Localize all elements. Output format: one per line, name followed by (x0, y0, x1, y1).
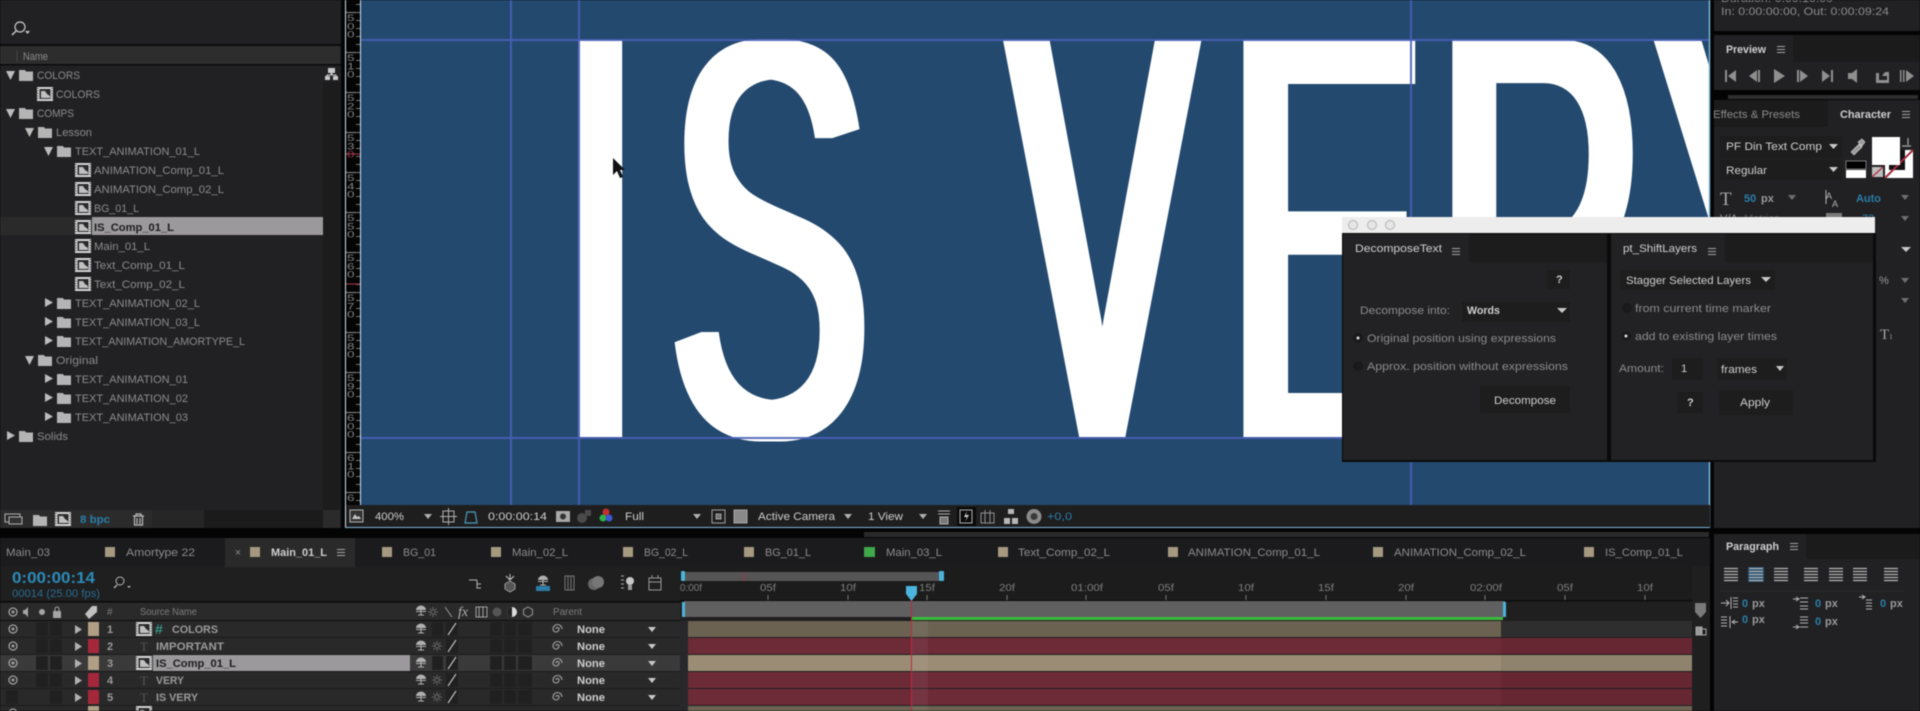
ruler numbers: 8 (347, 342, 355, 352)
stroke options arrow (1901, 247, 1911, 252)
kerning: Metrics (1744, 213, 1780, 225)
ruler tick labels (680, 583, 1653, 594)
icon: draft 3d (505, 574, 515, 592)
panel: preview (1714, 35, 1920, 90)
tab: BG_01: BG_01 (403, 547, 436, 559)
timecode: 00014 (25.00 fps) (12, 588, 100, 600)
stagger dropdown (1620, 270, 1775, 290)
indent: left (1721, 597, 1766, 610)
layer 2: IMPORTANT: IMPORTANT (156, 641, 224, 653)
apply button: Apply (1740, 397, 1771, 409)
radio: original position: Original position using expressions (1367, 333, 1557, 345)
icon: camera (556, 511, 570, 522)
ruler tick labels: 0:00f (680, 583, 702, 594)
floating window: scripts (1342, 217, 1876, 462)
ruler tick labels: 15f (1318, 583, 1334, 594)
exposure value: +0,0 (1047, 511, 1072, 523)
viewer timecode: 0:00:00:14 (488, 511, 547, 523)
ruler numbers: 5 (347, 94, 355, 103)
row: TEXT_ANIMATION_AMORTYPE_L: TEXT_ANIMATION_AMORTYPE_L (75, 336, 245, 348)
row: BG_01_L: BG_01_L (94, 203, 139, 215)
icon: interpret footage (5, 514, 22, 524)
panel: timeline (0, 538, 1710, 711)
indent: left: px (1752, 598, 1766, 610)
decompose into dropdown: Words (1467, 305, 1500, 317)
indent: left: 0 (1742, 598, 1748, 610)
row: Main_01_L: Main_01_L (94, 241, 150, 253)
row: IS_Comp_01_L selected: IS_Comp_01_L (94, 222, 174, 234)
leading: Auto (1856, 193, 1881, 205)
ruler tick labels: 05f (1158, 583, 1174, 594)
scale percent (1879, 275, 1909, 287)
ruler numbers: 0 (347, 471, 355, 480)
alignment icons (1724, 567, 1898, 582)
font size: T (1720, 189, 1732, 210)
row: Solids folder (7, 431, 69, 443)
header: number: # (107, 607, 113, 618)
row: COLORS folder: COLORS (37, 70, 80, 82)
help button: ? (1556, 274, 1563, 286)
tab: Amortype 22 (105, 547, 195, 559)
ruler numbers: 0 (347, 22, 355, 32)
baseline arrow (1901, 298, 1909, 303)
panel: character (1713, 100, 1920, 528)
preview controls (1725, 69, 1914, 83)
tab: Main_01_L active: × (235, 547, 241, 559)
tab: Main_02_L: Main_02_L (512, 547, 568, 559)
column header: Name: Name (23, 51, 48, 63)
panel: info: In: 0:00:00:00, Out: 0:00:09:24 (1721, 6, 1889, 18)
amount field: Amount: (1619, 363, 1664, 375)
row: Original folder: Original (56, 355, 98, 367)
header icon: audio (23, 607, 28, 617)
header icon: eye (9, 608, 17, 616)
row: Lesson folder: Lesson (56, 127, 92, 139)
layer 5: IS VERY: 5 (107, 692, 113, 704)
column header: Name (0, 46, 341, 66)
icon: rgb channels (600, 508, 612, 522)
column headers (0, 601, 680, 622)
decompose into dropdown: Decompose into: (1360, 305, 1450, 317)
indent: before paragraph: 0 (1815, 598, 1821, 610)
ruler numbers: 0 (347, 431, 355, 440)
ruler numbers: 0 (347, 391, 355, 400)
row: TEXT_ANIMATION_02: TEXT_ANIMATION_02 (75, 393, 188, 405)
tab: BG_01_L: BG_01_L (765, 547, 811, 559)
panel: project (0, 0, 341, 528)
indent: after paragraph: 0 (1815, 616, 1821, 628)
tab: Text_Comp_02_L: Text_Comp_02_L (1018, 547, 1110, 559)
indent: first line: 0 (1880, 598, 1886, 610)
panel: preview: Preview (1726, 44, 1766, 56)
project footer bar (0, 510, 340, 528)
tab: ANIMATION_Comp_02_L: ANIMATION_Comp_02_L (1394, 547, 1526, 559)
radio: from current time marker: from current time marker (1635, 303, 1771, 315)
icon: new folder (33, 515, 47, 526)
bar: COLORS (688, 621, 1501, 637)
row: Text_Comp_01_L: Text_Comp_01_L (94, 260, 185, 272)
scale percent: % (1879, 275, 1889, 287)
ruler numbers: 0 (347, 422, 355, 432)
tab bar (0, 538, 1710, 567)
bar: IS_Comp_01_L (688, 655, 1692, 671)
row: COLORS comp (37, 87, 100, 101)
ruler numbers: 5 (347, 294, 355, 303)
ruler numbers: 0 (347, 151, 355, 160)
frames dropdown: frames (1721, 364, 1758, 376)
tab: IS_Comp_01_L: IS_Comp_01_L (1605, 547, 1683, 559)
row: TEXT_ANIMATION_02_L: TEXT_ANIMATION_02_L (75, 298, 200, 310)
layer list (0, 621, 680, 711)
ruler numbers: 6 (347, 414, 355, 423)
panel: paragraph: Paragraph (1726, 541, 1779, 553)
ruler numbers: 1 (347, 462, 355, 472)
ruler numbers: 5 (347, 374, 355, 383)
ruler numbers: 1 (347, 62, 355, 72)
help button (1677, 392, 1703, 413)
layer 4: VERY (9, 673, 656, 688)
icon: new comp (55, 512, 71, 526)
layer 1: COLORS: 1 (107, 624, 113, 636)
ruler numbers (347, 14, 355, 503)
layer 1: COLORS: COLORS (172, 624, 218, 636)
icon: timeline (981, 510, 994, 523)
ruler numbers: 0 (347, 111, 355, 120)
row: ANIMATION_Comp_01_L: ANIMATION_Comp_01_L (94, 165, 224, 177)
layer 5: IS VERY (6, 690, 656, 705)
leading: A (1826, 191, 1832, 201)
ruler numbers: 7 (347, 302, 355, 312)
layer bars (680, 621, 1692, 711)
help button: ? (1687, 397, 1694, 409)
header icon: solo (39, 609, 45, 615)
leading: A (1832, 199, 1838, 209)
swatch: black and white (1846, 161, 1866, 178)
row: Text_Comp_02_L: Text_Comp_02_L (94, 279, 185, 291)
work area bar (680, 600, 1710, 620)
layer 2: IMPORTANT (9, 639, 656, 654)
row: ANIMATION_Comp_02_L: ANIMATION_Comp_02_L (94, 184, 224, 196)
ruler numbers: 6 (347, 262, 355, 272)
ruler tick labels: 05f (1557, 583, 1573, 594)
tab: Amortype 22: Amortype 22 (126, 547, 195, 559)
stagger dropdown: Stagger Selected Layers (1626, 275, 1752, 287)
header icon: lock (53, 607, 61, 618)
icon: shy layers (536, 576, 550, 591)
layer 3: IS_Comp_01_L selected (9, 655, 656, 671)
ruler numbers: 5 (347, 334, 355, 343)
layer 5: IS VERY: IS VERY (156, 692, 199, 704)
row: Original folder (25, 355, 98, 367)
row: TEXT_ANIMATION_01_L folder: TEXT_ANIMATION_01_L (75, 146, 200, 158)
ruler tick labels: 15f (919, 583, 935, 594)
icon: flowchart toggle (1004, 509, 1018, 524)
layer 5: IS VERY: None (577, 692, 605, 704)
ruler tick labels: 10f (840, 583, 856, 594)
decompose button: Decompose (1494, 395, 1556, 407)
indent: after paragraph: px (1825, 616, 1839, 628)
icon: frame blending (565, 576, 574, 590)
layer 1: COLORS (9, 621, 656, 637)
bar: VERY (688, 672, 1692, 688)
ruler numbers: 0 (347, 271, 355, 280)
camera selector: Active Camera (758, 511, 836, 523)
label: 8 bpc: 8 bpc (80, 514, 110, 526)
layer 4: VERY: 4 (107, 675, 114, 687)
kerning (1720, 213, 1909, 225)
ruler numbers: 9 (347, 382, 355, 392)
radio: add to existing layer times: add to existing layer times (1635, 331, 1778, 343)
ruler tick labels: 02:00f (1470, 583, 1502, 594)
apply button (1719, 390, 1793, 415)
icon: calendar (649, 575, 661, 590)
icon: trash (133, 514, 144, 525)
ruler (345, 0, 361, 528)
layer 1: COLORS: None (577, 624, 605, 636)
font family: PF Din Text Comp (1726, 141, 1822, 153)
header: Source Name: Source Name (140, 607, 197, 618)
tab: BG_01 (382, 547, 436, 559)
resolution: Full (625, 511, 644, 523)
icon: mouse cursor (613, 158, 625, 178)
layer 1: COLORS: # (155, 621, 163, 637)
tab: Main_01_L active: Main_01_L (271, 547, 327, 559)
decompose into dropdown (1360, 302, 1570, 322)
indent: right: 0 (1742, 614, 1748, 626)
layer 3: IS_Comp_01_L selected: None (577, 658, 605, 670)
icon: timeline search (114, 577, 131, 588)
tab: BG_02_L (623, 547, 688, 559)
time ruler (680, 566, 1692, 601)
scroll strip: side panels (1728, 95, 1918, 99)
leading (1826, 190, 1909, 209)
panel: paragraph (1714, 534, 1920, 711)
composition viewer (360, 0, 1710, 506)
icon: motion blur (588, 576, 604, 590)
layer 4: VERY: T (140, 673, 148, 688)
panel: info (1714, 0, 1920, 31)
ruler tick labels: 05f (760, 583, 776, 594)
indent: right (1721, 614, 1766, 628)
font style (1720, 160, 1842, 180)
tab: Character: Character (1840, 109, 1892, 121)
layer 2: IMPORTANT: None (577, 641, 605, 653)
icon: fast preview (957, 507, 976, 526)
icon: snapshot comp (350, 510, 363, 522)
icon: eyedropper (1851, 139, 1865, 155)
ruler numbers: 5 (347, 254, 355, 263)
timecode (12, 570, 100, 600)
layer 2: IMPORTANT: 2 (107, 641, 113, 653)
layer 2: IMPORTANT: T (140, 639, 148, 654)
ruler numbers: 0 (347, 71, 355, 80)
guides (361, 0, 1709, 505)
timeline switches (469, 574, 661, 592)
help button (1547, 270, 1570, 289)
ruler numbers: 5 (347, 174, 355, 183)
tab: Main_03_L: Main_03_L (886, 547, 942, 559)
layer 3: IS_Comp_01_L selected: IS_Comp_01_L (156, 658, 236, 670)
bar: IMPORTANT (688, 638, 1692, 654)
indent: first line: px (1890, 598, 1904, 610)
row: COLORS folder (6, 70, 80, 82)
ruler numbers: 5 (347, 214, 355, 223)
row: Text_Comp_02_L (75, 277, 185, 291)
ruler numbers: 0 (347, 231, 355, 240)
ruler tick labels: 10f (1238, 583, 1254, 594)
zoom level: 400% (375, 511, 404, 523)
tab: Effects & Presets: Effects & Presets (1713, 109, 1801, 121)
indent: first line (1859, 595, 1904, 610)
row: Lesson folder (25, 127, 92, 139)
row: TEXT_ANIMATION_03: TEXT_ANIMATION_03 (75, 412, 188, 424)
ruler numbers: 4 (347, 182, 355, 192)
bar: layer 6 (688, 706, 1692, 711)
big text: IS VERY (578, 39, 1710, 442)
row: Text_Comp_01_L (75, 258, 185, 272)
row: TEXT_ANIMATION_01: TEXT_ANIMATION_01 (75, 374, 188, 386)
indent: after paragraph (1793, 616, 1839, 629)
layer 4: VERY: None (577, 675, 605, 687)
scroll strip (864, 532, 1709, 537)
icon: pixel aspect (938, 511, 950, 524)
header: layer switches: fx (458, 605, 469, 620)
ruler numbers: 0 (347, 311, 355, 320)
ruler numbers: 5 (347, 222, 355, 232)
icon: mask (465, 512, 477, 523)
amount field (1619, 358, 1703, 380)
icon: exposure (1026, 509, 1042, 524)
swatch: no fill (1872, 167, 1883, 177)
layer 5: IS VERY: T (140, 690, 148, 705)
ruler numbers: 6 (347, 454, 355, 463)
ruler tick labels: 20f (1398, 583, 1414, 594)
font size: 50 (1744, 193, 1756, 205)
subscript T: T1 (1880, 327, 1893, 343)
row: Solids folder: Solids (37, 431, 69, 443)
icon: transparency grid (734, 510, 747, 523)
viewer toolbar (345, 505, 1710, 528)
font family (1720, 136, 1842, 158)
project tree (6, 70, 323, 443)
tab: Main_01_L active (235, 547, 345, 559)
playhead (906, 586, 917, 711)
ruler numbers: 5 (347, 54, 355, 63)
kerning: V/A (1720, 213, 1738, 225)
row: IS_Comp_01_L selected (75, 217, 323, 235)
ruler tick labels: 10f (1637, 583, 1653, 594)
ruler numbers: 0 (347, 351, 355, 360)
row: COMPS folder (6, 108, 74, 120)
timeline right column (1692, 566, 1710, 711)
ruler numbers: 5 (347, 14, 355, 23)
icon: flowchart (325, 68, 338, 80)
panel: DecomposeText (1343, 234, 1607, 460)
row: COMPS folder: COMPS (37, 108, 74, 120)
ruler numbers: 3 (347, 142, 355, 152)
tab: Main_03_L (864, 547, 942, 559)
tab: ANIMATION_Comp_01_L: ANIMATION_Comp_01_L (1188, 547, 1320, 559)
tab: BG_01_L (744, 547, 811, 559)
timecode: 0:00:00:14 (12, 570, 95, 587)
ruler numbers: 6 (347, 494, 355, 503)
ruler numbers: 5 (347, 134, 355, 143)
icon: toggle mask (712, 510, 725, 523)
font size (1720, 189, 1796, 210)
font size: px (1761, 193, 1775, 205)
row: Main_01_L (75, 239, 150, 253)
ruler numbers: 0 (347, 191, 355, 200)
row: TEXT_ANIMATION_03_L: TEXT_ANIMATION_03_L (75, 317, 200, 329)
window title bar (1342, 217, 1875, 233)
ruler numbers: 0 (347, 31, 355, 40)
row: COLORS comp: COLORS (56, 89, 100, 101)
ruler tick labels: 20f (999, 583, 1015, 594)
ruler tick labels: 01:00f (1071, 583, 1103, 594)
ruler numbers: 2 (347, 102, 355, 112)
icon: region grid (440, 508, 457, 525)
header: Parent: Parent (553, 607, 582, 618)
icon: show snapshot (577, 510, 591, 523)
decompose button (1480, 386, 1570, 413)
frames dropdown (1717, 358, 1787, 380)
tab: BG_02_L: BG_02_L (644, 547, 688, 559)
indent: right: px (1752, 614, 1766, 626)
swatch: fill and stroke (1872, 137, 1913, 178)
indent: before paragraph (1793, 597, 1839, 610)
tab title: DecomposeText (1355, 243, 1442, 255)
layer 4: VERY: VERY (156, 675, 185, 687)
amount field: 1 (1681, 363, 1687, 375)
indent: before paragraph: px (1825, 598, 1839, 610)
layer 3: IS_Comp_01_L selected: 3 (107, 658, 113, 670)
font style: Regular (1726, 165, 1767, 177)
icon: project search (12, 22, 30, 35)
layer 6 (cut off) (9, 706, 152, 711)
bar: IS VERY (688, 689, 1692, 705)
icon: graph bulb (621, 576, 634, 590)
tab title: pt_ShiftLayers (1623, 243, 1698, 255)
icon: comp mini flowchart (469, 580, 481, 588)
view selector: 1 View (868, 511, 903, 523)
kerning: 72 (1862, 213, 1874, 225)
tab: Main_03: Main_03 (6, 547, 50, 559)
row: BG_01_L (75, 201, 139, 215)
radio: approx position: Approx. position without expressions (1367, 361, 1569, 373)
panel: pt_ShiftLayers (1611, 234, 1873, 460)
header: layer switches (416, 605, 532, 620)
header icon: label tag (85, 606, 97, 619)
